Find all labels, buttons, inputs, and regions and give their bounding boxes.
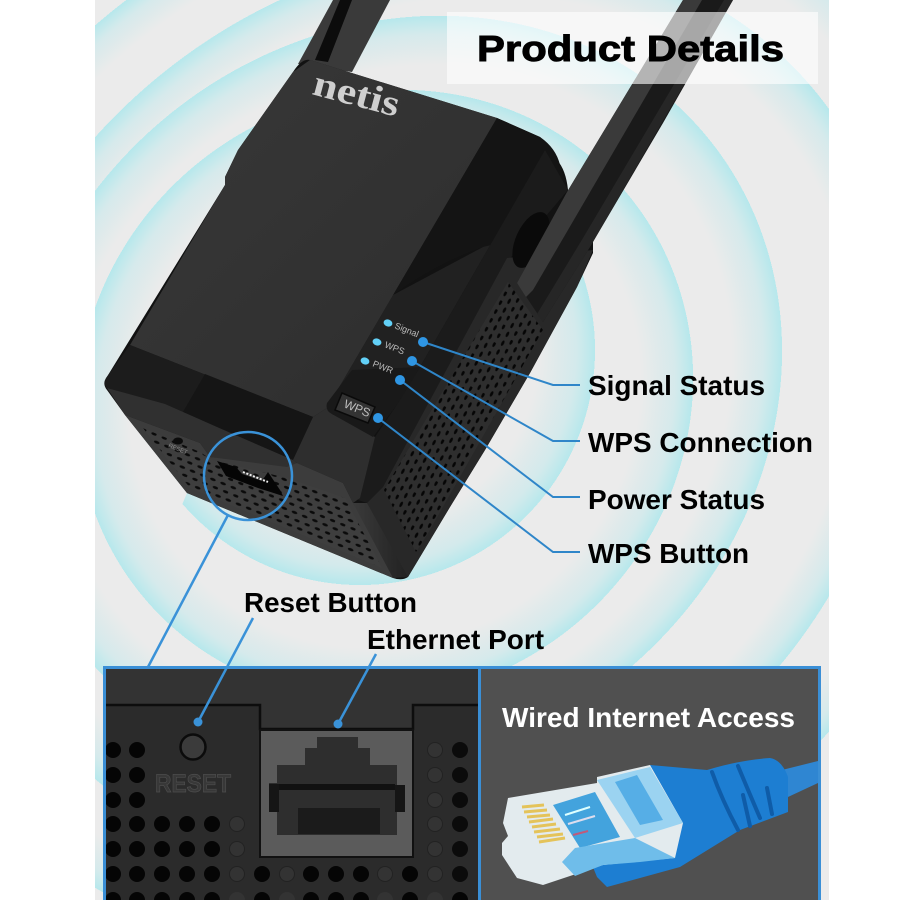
title box [447, 12, 818, 84]
top matte panel [130, 60, 497, 417]
leader: ethernet port [334, 654, 376, 728]
icon: ethernet cable [502, 758, 818, 887]
panel: wired internet access [480, 667, 819, 900]
glossy black wedge [393, 118, 568, 295]
callout: power status [395, 375, 765, 515]
ethernet slot [217, 461, 283, 496]
panel heading: Wired Internet Access [502, 702, 795, 733]
LED label signal: Signal [393, 321, 420, 339]
antenna blade [517, 0, 733, 322]
RJ45 socket [269, 737, 405, 835]
front lip [107, 388, 297, 470]
label: ethernet port: Ethernet Port [367, 624, 544, 655]
panel borders [104, 667, 820, 900]
LED label WPS: WPS [383, 340, 406, 357]
callout: WPS connection [407, 356, 813, 458]
LED power [360, 356, 370, 366]
close-up background [104, 667, 479, 900]
clear housing [502, 765, 683, 885]
panel inset [327, 367, 420, 437]
left antenna [298, 0, 390, 72]
antenna left facet [517, 0, 702, 297]
reset button hole [180, 734, 206, 760]
callout: signal status: Signal Status [588, 370, 765, 401]
LED signal [383, 318, 393, 328]
body silhouette [104, 60, 593, 579]
LED label PWR: PWR [371, 359, 395, 376]
panel: close-up of ports [104, 667, 479, 900]
contact window [553, 792, 620, 848]
side mesh [384, 282, 543, 552]
tiny reset print: RESET [167, 443, 188, 456]
front mesh [143, 428, 382, 568]
latch frame [597, 767, 683, 838]
corner shading [353, 503, 408, 578]
wire highlights [565, 807, 595, 835]
callout: signal status [418, 337, 765, 401]
right antenna [505, 0, 733, 322]
callout: WPS button: WPS Button [588, 538, 749, 569]
title: Product Details [477, 28, 784, 69]
router body [104, 60, 593, 579]
LED control panel [327, 318, 420, 437]
gold pins [522, 805, 565, 842]
callout: power status: Power Status [588, 484, 765, 515]
reset embossed label: RESET [155, 770, 231, 798]
LED WPS [372, 337, 382, 347]
antenna hub [505, 206, 557, 274]
callout: WPS button [373, 413, 749, 569]
magnifier circle and leader [148, 432, 292, 667]
port plate [260, 730, 413, 857]
vent holes [105, 742, 468, 900]
LED zone shading [327, 150, 545, 437]
side strip [358, 150, 568, 503]
callout: WPS connection: WPS Connection [588, 427, 813, 458]
antenna right facet [537, 0, 733, 322]
right panel fill [480, 667, 819, 900]
upper ledge [105, 668, 478, 729]
WPS physical button: WPS [342, 397, 372, 420]
reset pinhole [173, 438, 183, 444]
leader: reset button [194, 618, 253, 726]
lower lip [293, 408, 375, 503]
netis logo: netis [309, 63, 404, 125]
label: reset button: Reset Button [244, 587, 417, 618]
boot ribs [712, 766, 772, 830]
front face [125, 415, 398, 578]
side face [367, 250, 593, 577]
port recess lines [105, 705, 478, 729]
front glossy band [105, 345, 313, 460]
cable [782, 761, 818, 797]
front band reflection [183, 374, 313, 460]
latch tab [615, 775, 663, 825]
boot [590, 758, 788, 887]
lower housing blue [562, 838, 675, 876]
